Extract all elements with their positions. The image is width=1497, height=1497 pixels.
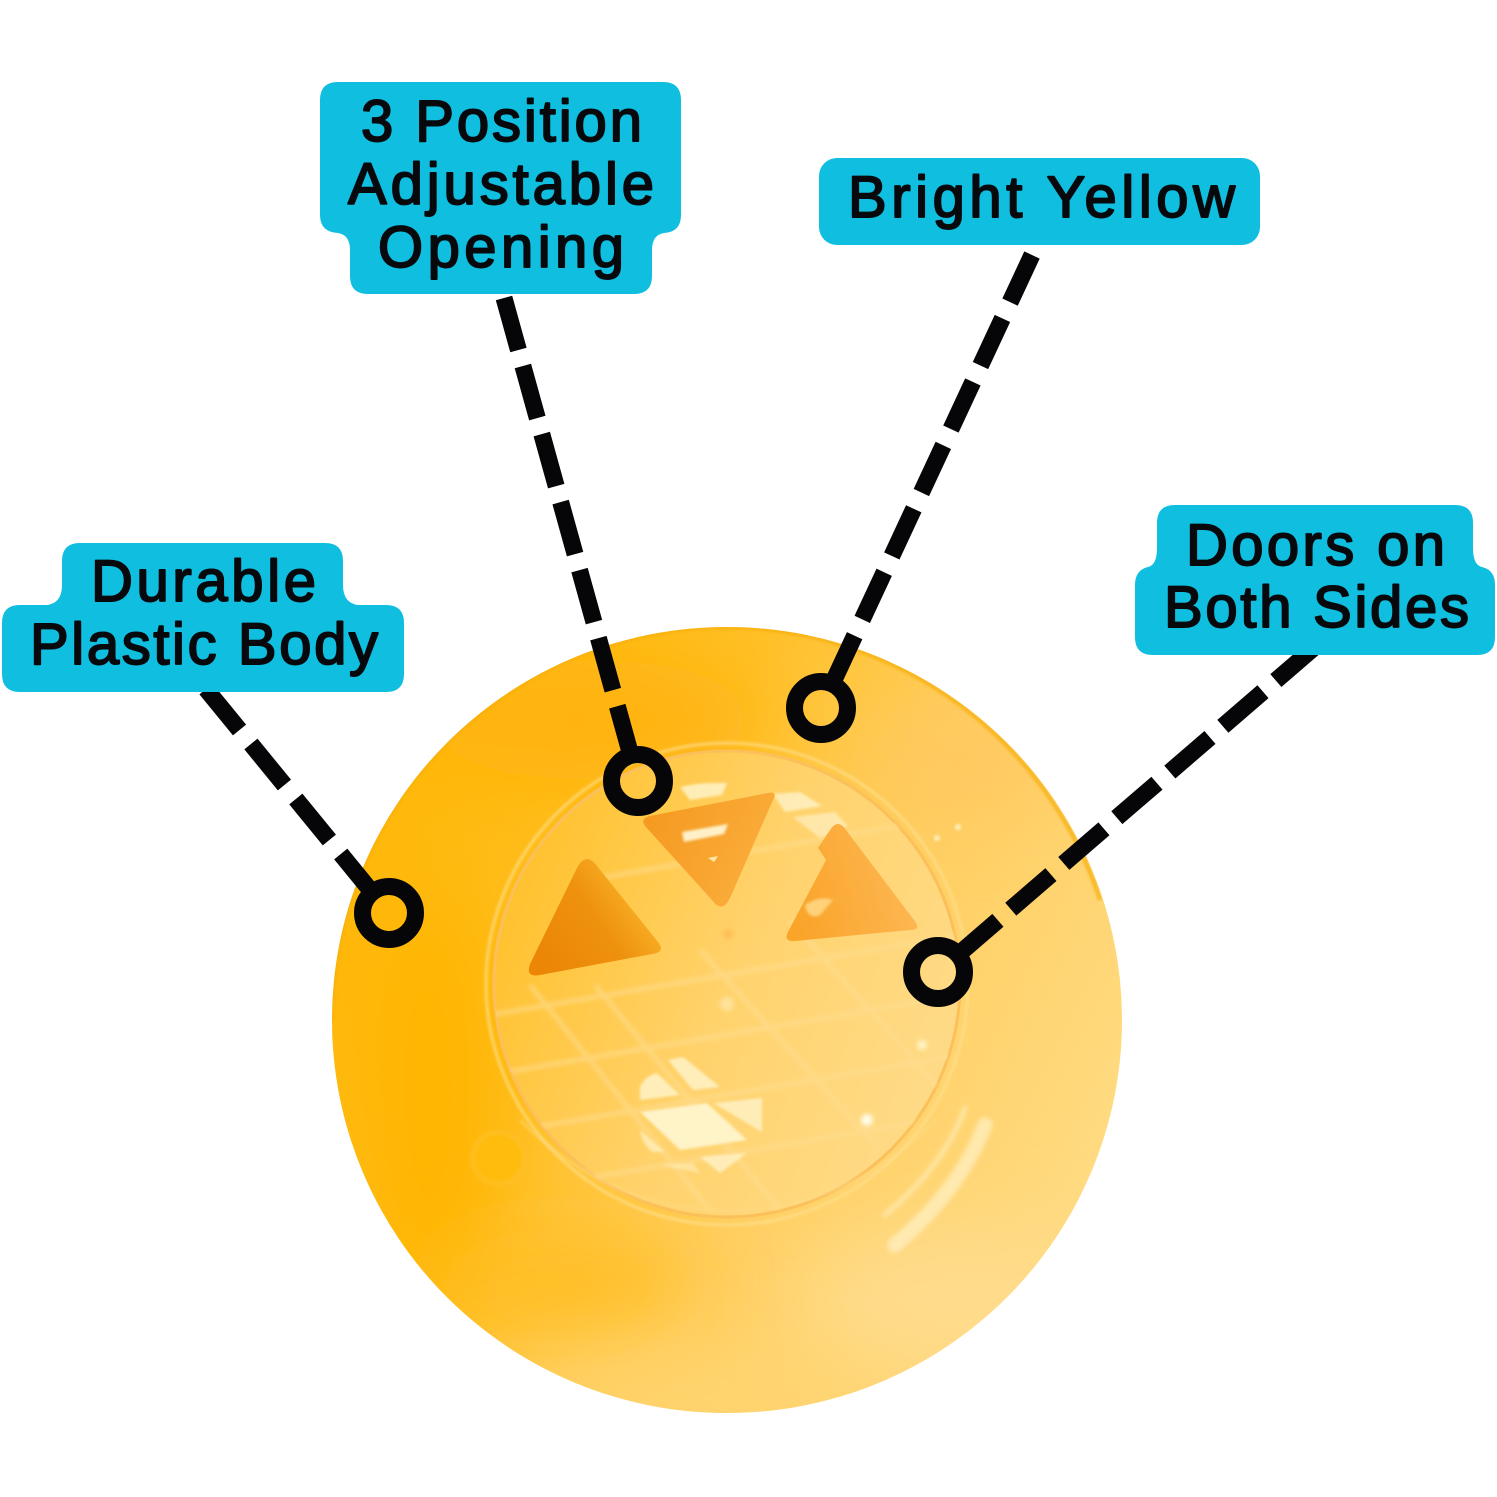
- label: Bright Yellow: [819, 158, 1260, 245]
- callout connector: bright yellow: [794, 255, 1032, 734]
- callout connector: doors on both sides: [912, 646, 1316, 998]
- label: 3 Position Adjustable Opening: [320, 82, 681, 294]
- reflection highlights: [640, 783, 848, 1173]
- label: Durable Plastic Body: Durable: [91, 549, 316, 614]
- label: Doors on Both Sides: [1135, 505, 1495, 655]
- label: Doors on Both Sides: Doors on: [1186, 513, 1445, 578]
- door disk with grid: [486, 743, 968, 1225]
- right arc highlights: [885, 1108, 985, 1245]
- small hinge bump on ball: [472, 1132, 524, 1184]
- product: yellow ball: [332, 627, 1122, 1430]
- label: Durable Plastic Body: [2, 543, 404, 692]
- door: left triangular opening: [529, 859, 661, 975]
- door: right triangular opening: [787, 824, 917, 941]
- label: 3 Position Adjustable Opening: Adjustable: [348, 152, 654, 217]
- label: Bright Yellow: Bright Yellow: [848, 165, 1236, 230]
- label: 3 Position Adjustable Opening: 3 Position: [361, 89, 642, 154]
- label: Durable Plastic Body: Plastic Body: [30, 612, 378, 677]
- door: top triangular opening: [643, 793, 775, 907]
- callout connector: 3 position opening: [504, 298, 664, 808]
- label: 3 Position Adjustable Opening: Opening: [378, 215, 624, 280]
- label: Doors on Both Sides: Both Sides: [1164, 575, 1469, 640]
- callout connector: durable plastic body: [206, 689, 416, 940]
